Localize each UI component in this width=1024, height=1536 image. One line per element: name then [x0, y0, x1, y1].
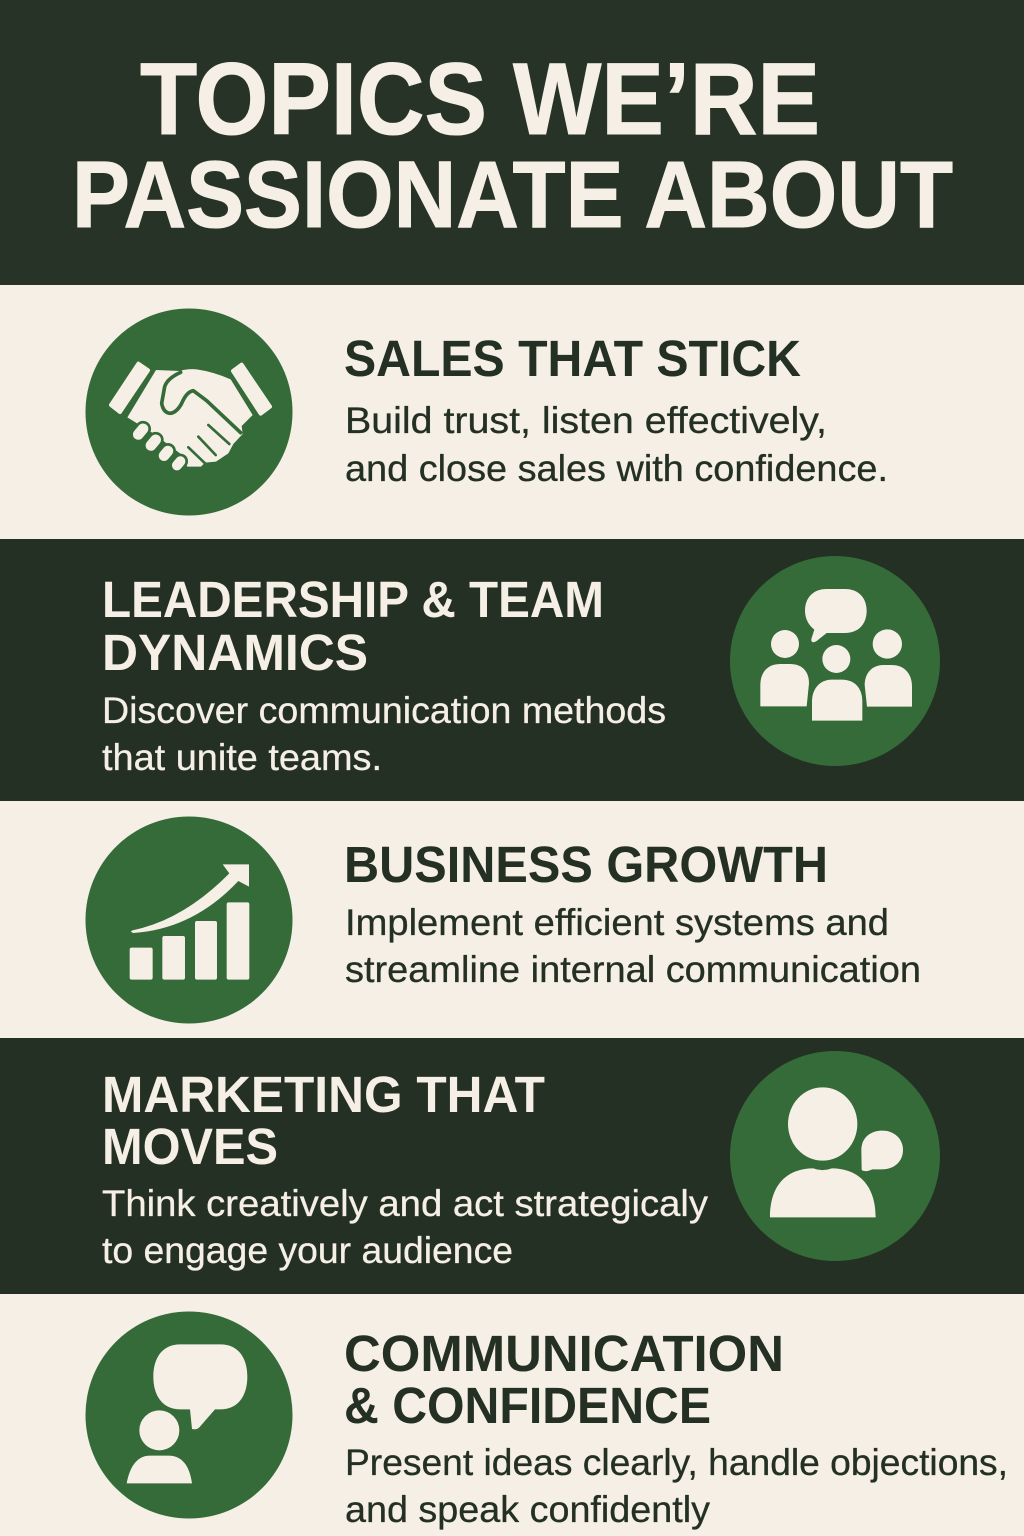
heading: sales that stick: SALES THAT STICK	[344, 330, 801, 387]
text: business description: streamline internal communication	[345, 948, 921, 990]
icon: handshake	[86, 308, 292, 516]
text: marketing description: to engage your audience	[102, 1230, 513, 1271]
title	[72, 42, 953, 248]
text: sales description: and close sales with confidence.	[345, 447, 888, 489]
panel: business growth	[0, 801, 1024, 1038]
text: leadership description: Discover communication methods	[102, 690, 666, 731]
text: sales description: Build trust, listen effectively,	[345, 399, 827, 441]
text: marketing description: Think creatively and act strategicaly	[102, 1183, 709, 1224]
text: business description	[345, 901, 921, 990]
text: leadership description: that unite teams.	[102, 737, 382, 778]
panel: communication and confidence	[0, 1294, 1024, 1536]
icon: speaker with speech bubble	[86, 1312, 292, 1518]
heading: business growth: BUSINESS GROWTH	[344, 836, 828, 893]
heading: leadership and team dynamics: LEADERSHIP & TEAM	[102, 571, 604, 628]
text: communication description: Present ideas clearly, handle objections,	[345, 1441, 1008, 1483]
heading: communication and confidence	[344, 1325, 784, 1434]
text: sales description	[345, 399, 888, 489]
heading: marketing that moves: MOVES	[102, 1118, 278, 1175]
heading: marketing that moves: MARKETING THAT	[102, 1066, 545, 1123]
heading: communication and confidence: COMMUNICATION	[344, 1325, 784, 1382]
panel: leadership and team dynamics	[0, 539, 1024, 801]
text: communication description: and speak confidently	[345, 1488, 710, 1530]
heading: leadership and team dynamics	[102, 571, 604, 681]
text: leadership description	[102, 690, 666, 778]
header band	[0, 0, 1024, 285]
panel: marketing that moves	[0, 1038, 1024, 1294]
icon: team with speech bubble	[730, 556, 940, 766]
heading: leadership and team dynamics: DYNAMICS	[102, 624, 368, 681]
text: marketing description	[102, 1183, 709, 1271]
text: communication description	[345, 1441, 1008, 1530]
text: business description: Implement efficient systems and	[345, 901, 889, 943]
panel: sales that stick	[0, 285, 1024, 539]
heading: marketing that moves	[102, 1066, 545, 1175]
icon: growth chart	[86, 816, 292, 1024]
icon: person with small speech bubble	[730, 1051, 940, 1261]
title: PASSIONATE ABOUT	[72, 142, 953, 248]
heading: communication and confidence: & CONFIDENCE	[344, 1377, 711, 1434]
title: TOPICS WE’RE	[140, 42, 820, 156]
